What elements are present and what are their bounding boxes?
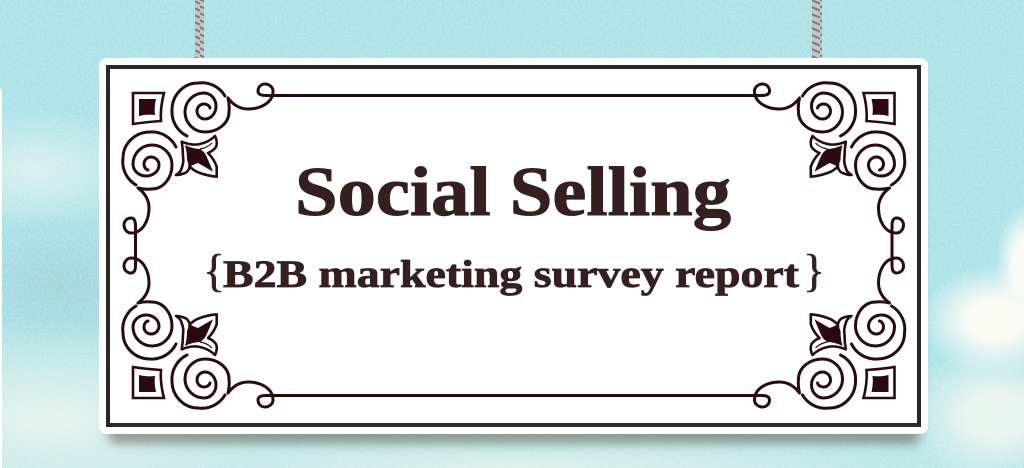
sign border — [108, 67, 919, 425]
ornament: bottom-right corner — [754, 258, 905, 408]
panel: hanging sign — [99, 58, 928, 434]
ornament: top-left corner — [123, 83, 273, 233]
ornament: frame lines — [136, 96, 892, 396]
brace: left: { — [203, 245, 225, 296]
rope: left — [195, 0, 204, 58]
title: Social Selling — [295, 154, 731, 231]
sign shadow — [108, 70, 920, 444]
brace: right: } — [803, 245, 825, 296]
subtitle: B2B marketing survey report — [223, 253, 799, 296]
ornament: top-right corner — [754, 83, 905, 233]
rope: right — [812, 0, 822, 58]
ornament: bottom-left corner — [123, 258, 273, 408]
subtitle — [203, 245, 825, 296]
